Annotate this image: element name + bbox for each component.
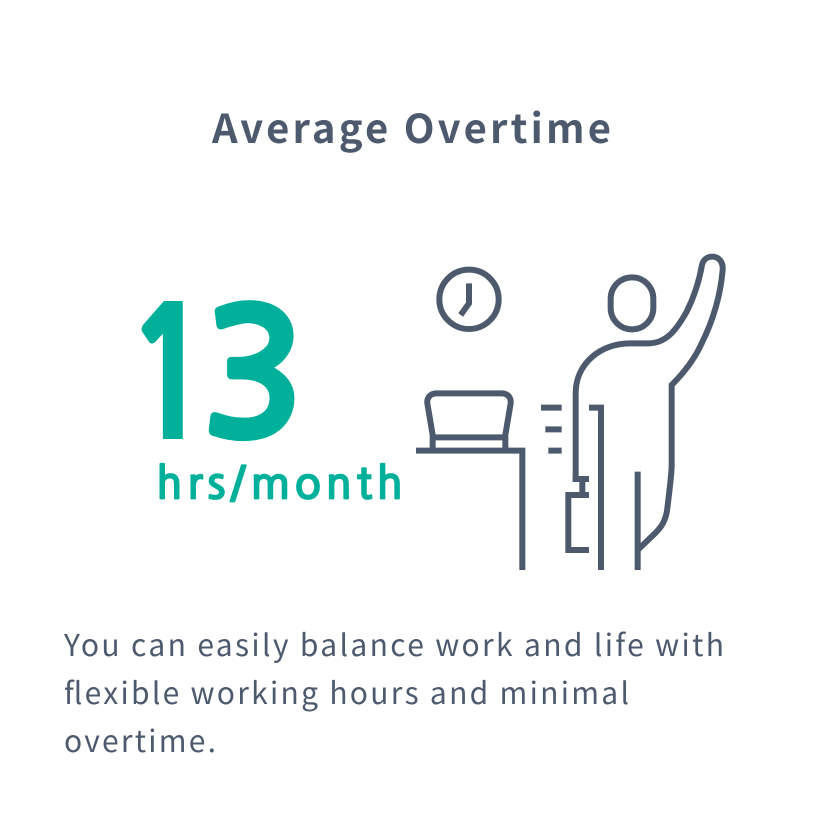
icon: person leaving the office	[416, 257, 723, 570]
icon: laptop on desk	[416, 393, 522, 570]
icon: briefcase	[568, 479, 589, 550]
icon: wall clock	[439, 270, 499, 329]
title: Average Overtime	[211, 97, 611, 155]
icon: motion lines	[541, 408, 562, 451]
unit: hrs/month: hrs/month	[156, 462, 403, 506]
description text: You can easily balance work and life with	[63, 621, 724, 665]
icon: raised arm and body	[576, 257, 723, 550]
big number: 13: 1	[124, 284, 214, 468]
icon: head	[611, 277, 653, 329]
description text: flexible working hours and minimal	[64, 669, 629, 713]
description text	[63, 621, 724, 761]
big number: 13	[142, 300, 294, 442]
big number: 13: 3	[201, 291, 306, 464]
description text: overtime.	[64, 717, 216, 761]
icon: inner arm and legs	[589, 408, 638, 570]
